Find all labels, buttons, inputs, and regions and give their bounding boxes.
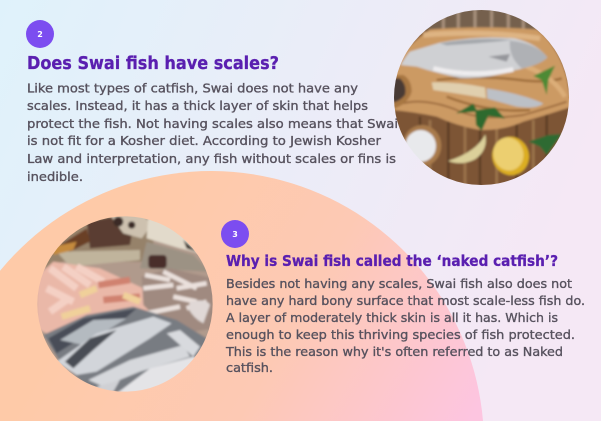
lemon [490, 135, 530, 177]
scales and stall [43, 215, 153, 268]
background peach arc [0, 171, 483, 421]
lime wedge [448, 134, 486, 163]
small mixed fish [142, 268, 213, 332]
body text: naked catfish: A layer of moderately thick skin is all it has. Which is [226, 311, 558, 326]
pink fish pile [37, 262, 150, 335]
body text: naked catfish [225, 277, 585, 376]
herbs [456, 103, 505, 131]
body text: naked catfish: have any hard bony surface that most scale-less fish do. [226, 294, 585, 309]
body text: scales [27, 82, 398, 185]
body text: scales: inedible. [27, 170, 83, 185]
large silver fish [43, 307, 207, 392]
number badge 2: 2 [37, 30, 43, 39]
body text: scales: scales. Instead, it has a thick layer of skin that helps [27, 99, 368, 114]
heading: Why is Swai fish called the 'naked catfish'?: Why is Swai fish called the ‘naked catfish’? [226, 252, 558, 270]
body text: scales: is not fit for a Kosher diet. According to Jewish Kosher [27, 134, 382, 149]
body text: naked catfish: This is the reason why it's often referred to as Naked [225, 345, 563, 360]
section 2: scales [26, 20, 398, 185]
number badge 3 [221, 220, 249, 248]
number badge 2 [26, 20, 54, 48]
photo: fish on wooden board [390, 7, 573, 190]
pepper bowl [394, 74, 412, 109]
body text: naked catfish: Besides not having any scales, Swai fish also does not [226, 277, 572, 292]
heading: Does Swai fish have scales?: Does Swai fish have scales? [27, 53, 279, 74]
body text: scales: Like most types of catfish, Swai does not have any [27, 82, 358, 96]
body text: scales: protect the fish. Not having scales also means that Swai [27, 117, 398, 132]
photo: fish market [33, 213, 217, 397]
section 3: naked catfish [221, 220, 585, 376]
body text: naked catfish: catfish. [226, 361, 273, 376]
body text: scales: Law and interpretation, any fish without scales or fins is [27, 152, 396, 167]
salt bowl [403, 125, 441, 166]
cutting board [392, 27, 572, 130]
fish [401, 37, 547, 78]
body text: naked catfish: enough to keep this thriving species of fish protected. [226, 328, 575, 343]
number badge 3: 3 [232, 230, 238, 239]
knife [432, 82, 486, 98]
